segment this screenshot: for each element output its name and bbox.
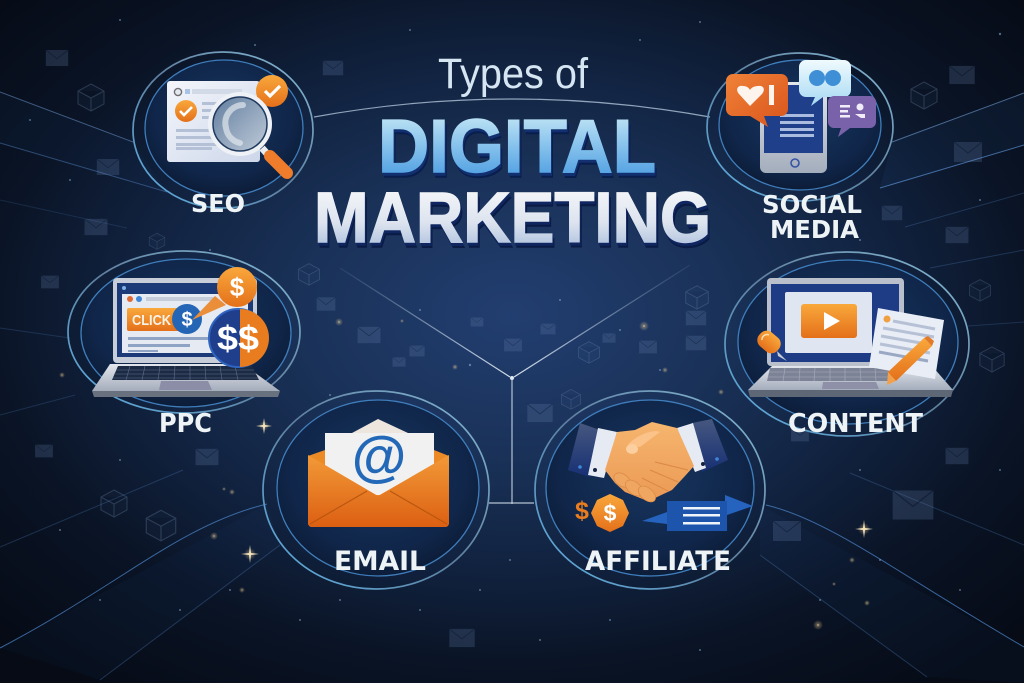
icon: right check badge [256,75,288,107]
icon: orange pin [754,327,787,361]
icon: handshake [568,419,728,505]
panel: email [263,391,489,589]
icon: blue bubble [799,60,851,106]
icon: phone [760,82,827,173]
label: affiliate: AFFILIATE [585,546,731,577]
SEO rings [133,52,313,208]
label: social media: SOCIAL [762,190,862,219]
icon: dollar sign and coin: $ [575,497,589,525]
icon: split dollar coin [209,309,269,367]
label: social media [762,190,862,244]
title: digital: DIGITAL [380,109,658,193]
icon: click button [127,308,185,331]
social rings [707,53,893,201]
panel: affiliate [535,391,765,589]
title: marketing: MARKETING [314,179,711,258]
icon: blue arrow banner [642,495,753,531]
title: marketing: MARKETING [315,182,712,261]
label: email: EMAIL [334,546,426,577]
icon: blue dollar coin: $ [181,309,193,331]
panel: SEO [133,52,313,218]
title: marketing: MARKETING [316,184,713,263]
icon: SEO page [167,81,260,162]
icon: laptop [92,278,280,397]
label: social media: MEDIA [770,215,860,244]
icon: left check badge [175,100,197,122]
icon: dollar sign and coin: $ [604,500,617,526]
email rings [263,391,489,589]
icon: envelope: @ [352,424,406,487]
icon: split dollar coin: $$ [217,320,259,358]
sparkle stars [59,318,873,630]
icon: magnifier [210,94,287,173]
icon: pen and orange coin: $ [230,272,245,302]
icon: pen and orange coin [192,267,257,320]
icon: document and pencil [869,308,944,385]
panel: PPC [68,251,300,439]
affiliate rings [535,391,765,589]
label: PPC: PPC [159,409,212,439]
icon: purple bubble [828,96,876,137]
icon: envelope [308,419,449,527]
connector lines [314,99,710,504]
title [314,50,713,263]
panel: social media [707,53,893,244]
panel: content [725,252,969,439]
PPC rings [68,251,300,413]
icon: blue dollar coin [172,304,202,334]
icon: click button: CLICK [132,312,171,329]
icon: laptop with video [748,278,953,397]
title: digital: DIGITAL [379,107,657,191]
label: content: CONTENT [788,409,923,439]
title: digital: DIGITAL [378,104,656,188]
icon: dollar sign and coin [575,494,629,532]
title: types of: Types of [438,50,589,98]
icon: orange like bubble [726,74,788,127]
content rings [725,252,969,436]
label: SEO: SEO [191,189,245,218]
